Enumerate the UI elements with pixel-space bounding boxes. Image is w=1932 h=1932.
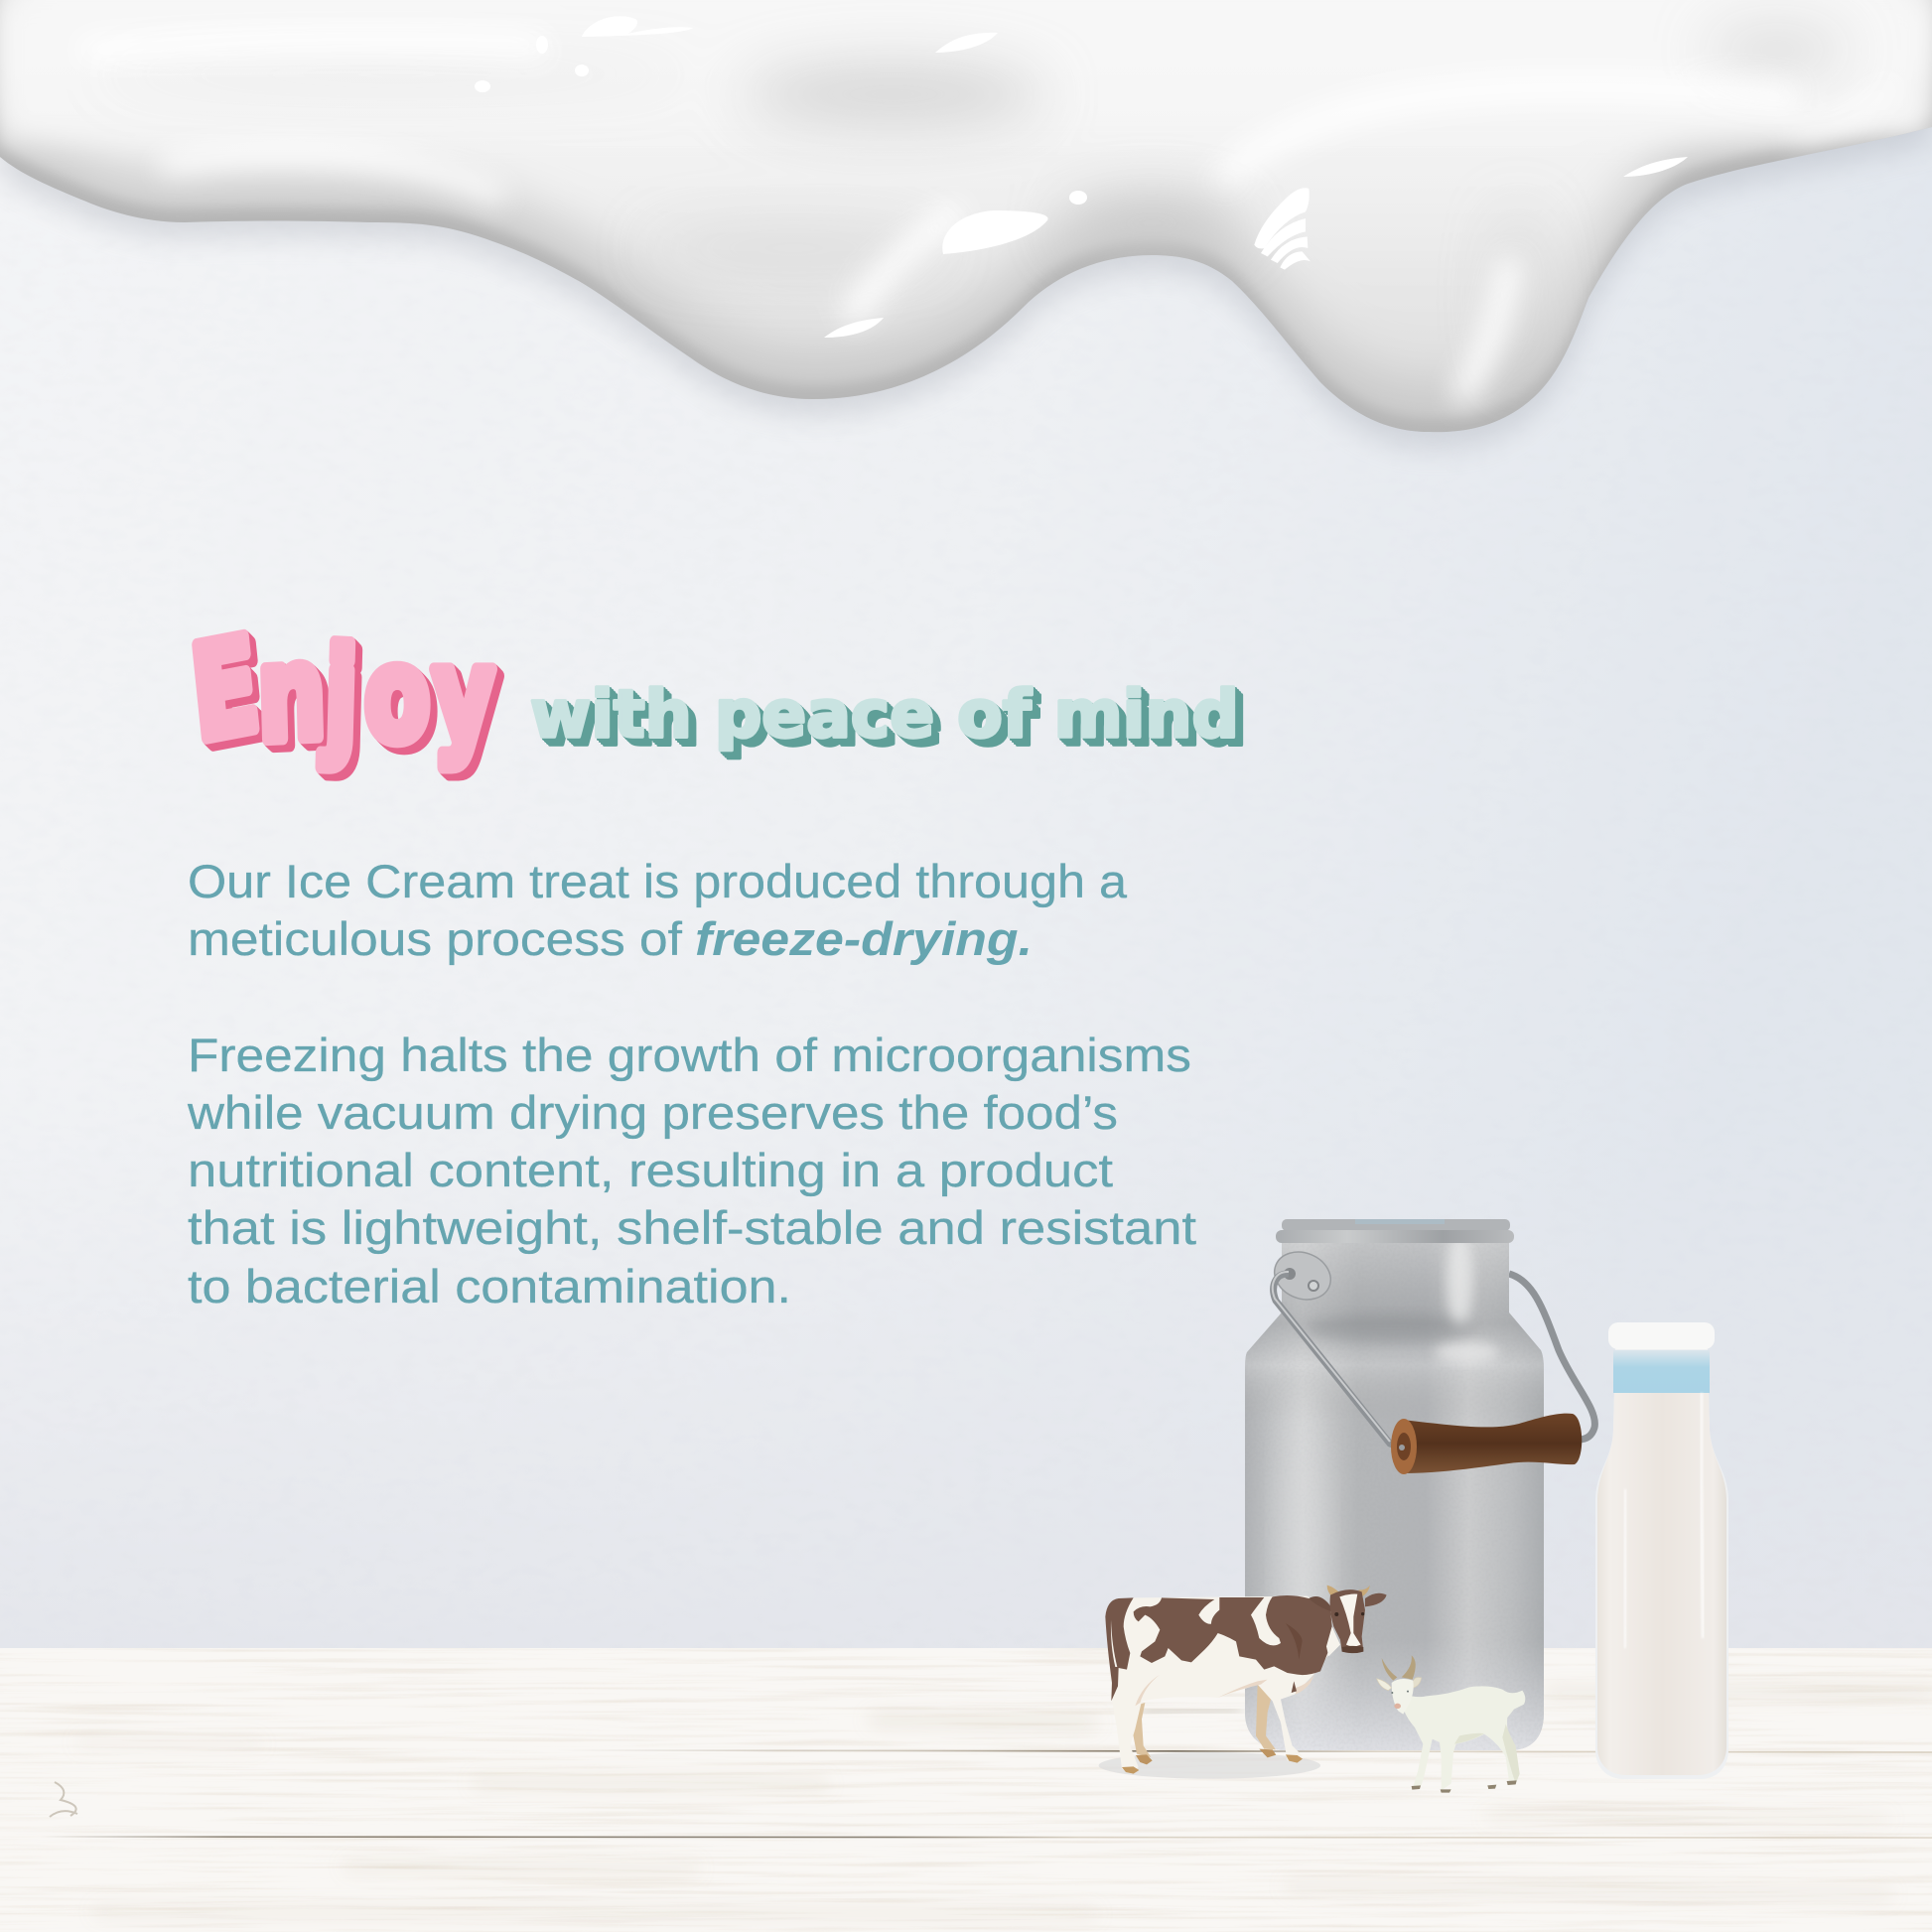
paragraph one	[188, 855, 1128, 965]
goat	[1377, 1655, 1525, 1793]
cow patches	[1105, 1595, 1332, 1701]
milk cast shadow	[0, 16, 1932, 448]
goat head	[1377, 1678, 1422, 1715]
heading word: Enjoy: Enjoy	[186, 609, 494, 771]
paragraph two: to bacterial contamination.	[188, 1260, 791, 1312]
cow	[1099, 1586, 1387, 1779]
can body	[1241, 1233, 1549, 1752]
goat body	[1402, 1686, 1525, 1790]
paragraph two	[187, 1029, 1196, 1312]
cow ground shadow	[1099, 1752, 1320, 1779]
paragraph two: that is lightweight, shelf-stable and resistant	[188, 1201, 1196, 1254]
cow far legs	[1130, 1685, 1276, 1757]
paragraph one: meticulous process of	[188, 912, 683, 965]
heading phrase: with peace of mind: with peace of mind	[530, 676, 1239, 753]
wooden grip	[1391, 1414, 1582, 1474]
cow head	[1309, 1586, 1387, 1656]
milk can	[1241, 1219, 1594, 1752]
bottle cap	[1608, 1322, 1715, 1349]
paragraph two: Freezing halts the growth of microorganisms	[188, 1029, 1191, 1081]
can rivet plate	[1267, 1244, 1338, 1308]
bottle blue neck	[1613, 1350, 1710, 1393]
can rim	[1276, 1219, 1514, 1243]
milk bottle	[1595, 1322, 1728, 1779]
soft grey folds	[750, 16, 1833, 251]
soft white highlights	[165, 81, 1833, 413]
can rear handle wire	[1509, 1274, 1594, 1440]
heading	[186, 609, 1239, 771]
scalloped shell highlight	[1254, 188, 1311, 270]
paragraph one: Our Ice Cream treat is produced through a	[188, 855, 1128, 907]
goat horns	[1382, 1655, 1416, 1681]
cow body	[1110, 1596, 1332, 1774]
paragraph one: freeze-drying.	[695, 912, 1033, 965]
can front handle wire	[1274, 1274, 1405, 1449]
paragraph two: while vacuum drying preserves the food’s	[187, 1086, 1118, 1139]
can ground shadow	[1281, 1747, 1529, 1753]
milk drip	[0, 0, 1932, 448]
goat hooves	[1412, 1780, 1517, 1793]
specular highlights	[475, 16, 1688, 338]
cow hooves	[1122, 1754, 1303, 1774]
body copy	[187, 855, 1196, 1312]
bottle glass	[1595, 1348, 1728, 1779]
wooden table	[0, 1648, 1932, 1932]
paragraph two: nutritional content, resulting in a product	[188, 1144, 1113, 1196]
bottle milk	[1597, 1393, 1726, 1775]
